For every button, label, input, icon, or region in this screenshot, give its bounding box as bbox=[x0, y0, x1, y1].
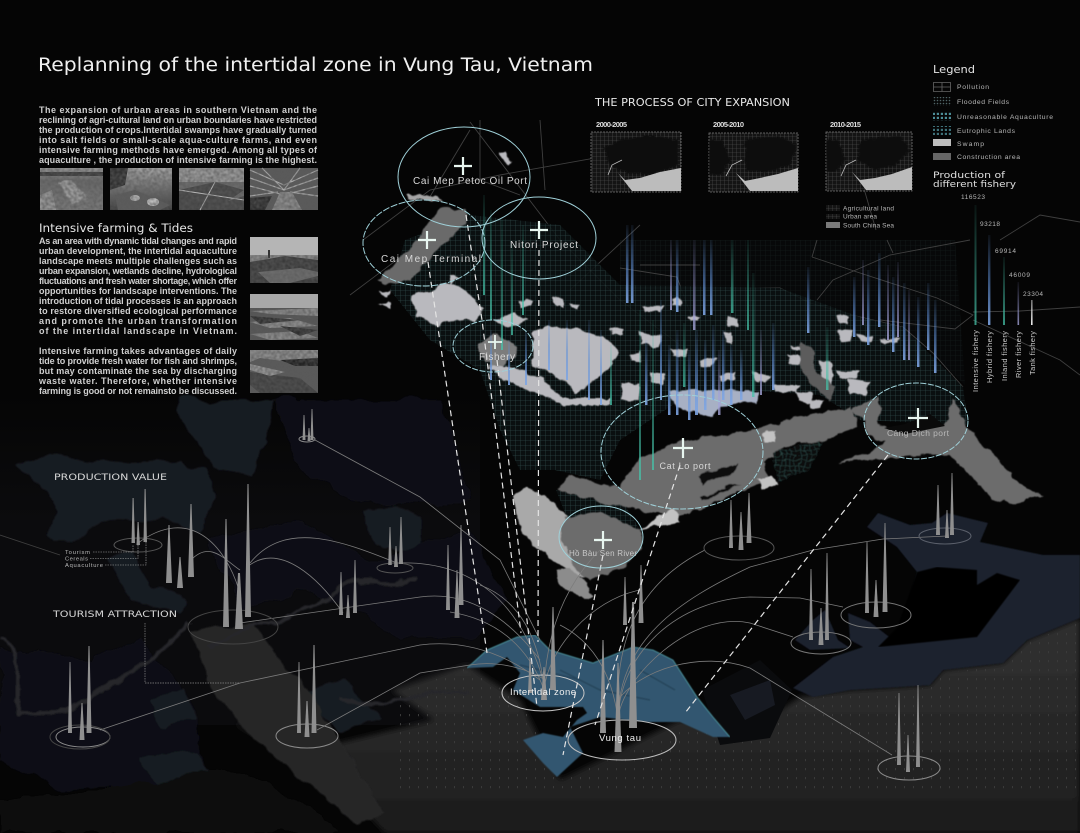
photo: fish ponds bbox=[179, 168, 244, 210]
map: 2010-2015: 2010-2015 bbox=[830, 120, 861, 129]
vung tau island white bbox=[513, 487, 585, 578]
site: Nitori Project: Nitori Project bbox=[510, 240, 578, 251]
bar: Intensive fishery: 116523 bbox=[961, 194, 985, 201]
bar: Inland fishery bbox=[995, 248, 1016, 381]
text block: intro: the production of crops.Intertidal swamps have gradually turned bbox=[39, 125, 317, 135]
spikes group B bbox=[166, 504, 194, 588]
text block: intro: aquaculture , the production of intensive farming is the highest. bbox=[39, 155, 317, 165]
spikes group H bbox=[276, 645, 338, 748]
bar: Intensive fishery: Intensive fishery bbox=[971, 330, 980, 392]
west island bbox=[410, 283, 483, 327]
cat lo dark water cuts bbox=[698, 464, 742, 501]
can dich bay bbox=[884, 414, 945, 434]
bar: Tank fishery bbox=[1023, 291, 1043, 375]
text block: tides: Intensive farming takes advantages of daily bbox=[39, 346, 237, 356]
bar: Intensive fishery bbox=[961, 194, 985, 392]
text block: tides: landscape meets multiple challenges such as bbox=[39, 256, 237, 266]
label: Vung tau: Vung tau bbox=[599, 733, 641, 744]
title: Replanning of the intertidal zone in Vung Tau, Vietnam bbox=[38, 55, 593, 76]
heading: Intensive farming and Tides: Intensive farming & Tides bbox=[39, 221, 193, 235]
site: Nitori Project bbox=[482, 197, 596, 279]
text block: intro: The expansion of urban areas in southern Vietnam and the bbox=[39, 105, 317, 115]
data bars over wetland bbox=[483, 195, 936, 480]
legend: Flooded Fields: Flooded Fields bbox=[957, 99, 1010, 106]
swamp area bbox=[532, 326, 620, 392]
map: 2010-2015 bbox=[826, 120, 912, 191]
chart heading bbox=[933, 171, 1017, 190]
text block: tides: introduction of tidal processes is an approach bbox=[39, 296, 237, 306]
bar: Tank fishery: 23304 bbox=[1023, 291, 1043, 298]
bar: Hybrid fishery bbox=[980, 221, 1000, 383]
production value key: Tourism bbox=[65, 550, 90, 556]
bar: Hybrid fishery: 93218 bbox=[980, 221, 1000, 228]
text block: intro bbox=[39, 105, 318, 165]
bar: River fishery: River fishery bbox=[1014, 331, 1023, 378]
south tip bbox=[556, 568, 596, 600]
site: Cai Mep Terminal bbox=[363, 200, 485, 286]
site: Cai Mep Petoc Oil Port bbox=[398, 127, 530, 227]
site: Ho Bau Son River bbox=[559, 506, 643, 568]
map: 2005-2010: 2005-2010 bbox=[713, 120, 744, 129]
dark bay right bbox=[878, 567, 1020, 647]
spikes group: production legend bbox=[114, 489, 162, 552]
chart heading: Production of bbox=[933, 171, 1006, 181]
photo row bbox=[40, 168, 318, 210]
text block: tides: waste water. Therefore, whether intensive bbox=[38, 376, 237, 386]
strip near oil port bbox=[405, 195, 442, 200]
photo: mudflat bbox=[250, 350, 318, 393]
text block: tides: tide to provide fresh water for fish and shrimps, bbox=[39, 356, 237, 366]
site: Cai Mep Petoc Oil Port: Cai Mep Petoc Oil Port bbox=[413, 176, 527, 187]
navy water left bbox=[15, 457, 215, 543]
legend: Unreasonable Aquaculture: Unreasonable Aquaculture bbox=[957, 114, 1053, 121]
dark land upper bbox=[273, 400, 470, 505]
legend: Eutrophic Lands: Eutrophic Lands bbox=[957, 128, 1016, 135]
site: Can Dich port bbox=[864, 383, 968, 459]
spikes group L bbox=[841, 523, 911, 628]
text block: tides: urban development, the intertidal aquaculture bbox=[39, 246, 237, 256]
faint grid above the coast road bbox=[620, 240, 965, 385]
spikes group centre-left bbox=[446, 525, 464, 618]
bar: River fishery bbox=[1009, 272, 1030, 378]
can dich land bbox=[838, 395, 1042, 504]
spikes group G bbox=[50, 646, 110, 749]
production value key: Aquaculture bbox=[65, 563, 103, 569]
site: Fishery bbox=[453, 320, 533, 372]
vung tau island grey bbox=[560, 512, 642, 582]
text block: tides: farming is good or not remainsto be discussed. bbox=[39, 386, 237, 396]
production value key bbox=[65, 542, 146, 569]
tourism attraction leader line bbox=[145, 623, 240, 683]
heading: city expansion: THE PROCESS OF CITY EXPANSION bbox=[594, 97, 790, 109]
site: Cai Mep Terminal: Cai Mep Terminal bbox=[381, 254, 481, 265]
chart heading: different fishery bbox=[933, 180, 1017, 190]
photo: shore tower bbox=[250, 237, 318, 283]
grid pattern zones bbox=[390, 215, 968, 530]
coast south of swamp bbox=[490, 298, 900, 408]
river lines bbox=[0, 575, 470, 716]
swatch: South China Sea: South China Sea bbox=[843, 222, 894, 230]
legend title: Legend bbox=[933, 64, 975, 76]
grey estuary bbox=[190, 625, 385, 825]
text block: intro: into salt fields or small-scale aqua-culture farms, and even bbox=[39, 135, 317, 145]
road network bbox=[0, 120, 1080, 555]
blue-white marsh cluster bbox=[668, 390, 760, 417]
bar: Inland fishery: Inland fishery bbox=[1000, 331, 1009, 381]
white sand patches bbox=[639, 431, 778, 530]
text block: tides: of the intertidal landscape in Vietnam. bbox=[39, 326, 237, 336]
left dim land bbox=[0, 395, 480, 725]
spikes group D bbox=[299, 409, 315, 442]
coastline islands and land bbox=[378, 150, 1042, 600]
text block: tides: and promote the urban transformation bbox=[39, 316, 237, 326]
map: 2000-2005 bbox=[591, 120, 681, 192]
text block: intro: reclining of agri-cultural land on urban boundaries have restricted bbox=[39, 115, 317, 125]
map legend bbox=[826, 205, 894, 230]
spikes group K bbox=[791, 553, 851, 654]
navy water right bbox=[793, 513, 1080, 697]
spikes group J bbox=[919, 473, 971, 544]
spikes group south-east bbox=[878, 685, 940, 780]
photo: greenhouse bbox=[250, 168, 318, 210]
site: Cat Lo port: Cat Lo port bbox=[660, 461, 711, 471]
fishery production chart bbox=[933, 171, 1043, 392]
legend: Pollution: Pollution bbox=[957, 84, 989, 91]
dashed site connectors bbox=[428, 215, 888, 755]
swatch: urban area: Urban area bbox=[843, 214, 877, 220]
site: Ho Bau Son River: Hồ Bàu Sen River bbox=[569, 549, 637, 558]
legend bbox=[933, 64, 1053, 161]
site: Fishery: Fishery bbox=[479, 352, 515, 363]
text block: tides: urban expansion, wetlands decline, hydrological bbox=[39, 266, 237, 276]
photo: tidal flat bbox=[250, 294, 318, 340]
spikes group C bbox=[188, 484, 278, 644]
legend: Swamp: Swamp bbox=[957, 141, 984, 148]
spikes group E bbox=[377, 517, 413, 573]
text block: tides: As an area with dynamic tidal changes and rapid bbox=[39, 236, 237, 246]
ground plane bbox=[234, 618, 1080, 833]
dark land centre bbox=[210, 520, 510, 640]
cat lo peninsula bbox=[557, 407, 858, 514]
navy patches low bbox=[140, 680, 380, 800]
dark lower band bbox=[0, 770, 340, 833]
small islands bbox=[378, 150, 580, 327]
base map: delta terrain bbox=[0, 395, 1080, 833]
bar: Tank fishery: Tank fishery bbox=[1028, 331, 1037, 375]
text block: intro: intensive farming methods have emerged. Among all types of bbox=[39, 145, 318, 155]
navy water top bbox=[177, 400, 273, 480]
text block: tides: fluctuations and fresh water shortage, which offer bbox=[39, 276, 237, 286]
bar: Inland fishery: 69914 bbox=[995, 248, 1016, 255]
label: Intertidal zone: Intertidal zone bbox=[510, 687, 576, 698]
site: Cat Lo port bbox=[601, 395, 763, 509]
text block: tides: but may contaminate the sea by discharging bbox=[39, 366, 237, 376]
vung tau blue region bbox=[467, 635, 730, 777]
lower left land and water bbox=[0, 400, 510, 833]
production spikes bbox=[50, 409, 971, 780]
terminal strip bbox=[378, 208, 467, 285]
spikes group intertidal bbox=[502, 607, 584, 711]
grid beach bbox=[772, 440, 825, 482]
spikes group centre bbox=[623, 565, 644, 625]
bar: River fishery: 46009 bbox=[1009, 272, 1030, 279]
lower left land bbox=[0, 640, 210, 790]
heading: production value: PRODUCTION VALUE bbox=[54, 473, 167, 483]
spikes group F bbox=[339, 560, 357, 618]
map: 2000-2005: 2000-2005 bbox=[596, 120, 627, 129]
site circles bbox=[363, 127, 968, 698]
bar: Hybrid fishery: Hybrid fishery bbox=[985, 331, 994, 383]
fishery island bbox=[478, 335, 518, 372]
production value key: Cereals bbox=[65, 556, 88, 562]
navy near ring bbox=[795, 610, 850, 650]
photo: harbour boats bbox=[110, 168, 172, 210]
dark patch near coast bbox=[702, 660, 792, 745]
swatch: agricultural land: Agricultural land bbox=[843, 206, 894, 212]
navy water inlet bbox=[112, 552, 190, 612]
navy water mid bbox=[365, 505, 420, 552]
spikes group vung tau bbox=[568, 602, 676, 760]
site: Can Dich port: Cảng Dịch port bbox=[887, 428, 950, 438]
heading: tourism attraction: TOURISM ATTRACTION bbox=[52, 610, 177, 620]
text block: tides: to restore diversified ecological performance bbox=[39, 306, 237, 316]
legend: Construction area: Construction area bbox=[957, 154, 1020, 161]
dotted ground texture bbox=[400, 621, 1080, 790]
photo: pier bbox=[40, 168, 103, 210]
map: 2005-2010 bbox=[709, 120, 798, 192]
connection arcs bbox=[100, 440, 947, 755]
dark-water islands bbox=[800, 340, 835, 400]
text block: tides: opportunities for landscape interventions. The bbox=[39, 286, 237, 296]
spikes group I bbox=[704, 493, 774, 560]
text block: tides bbox=[38, 236, 237, 396]
photo column bbox=[250, 237, 318, 393]
